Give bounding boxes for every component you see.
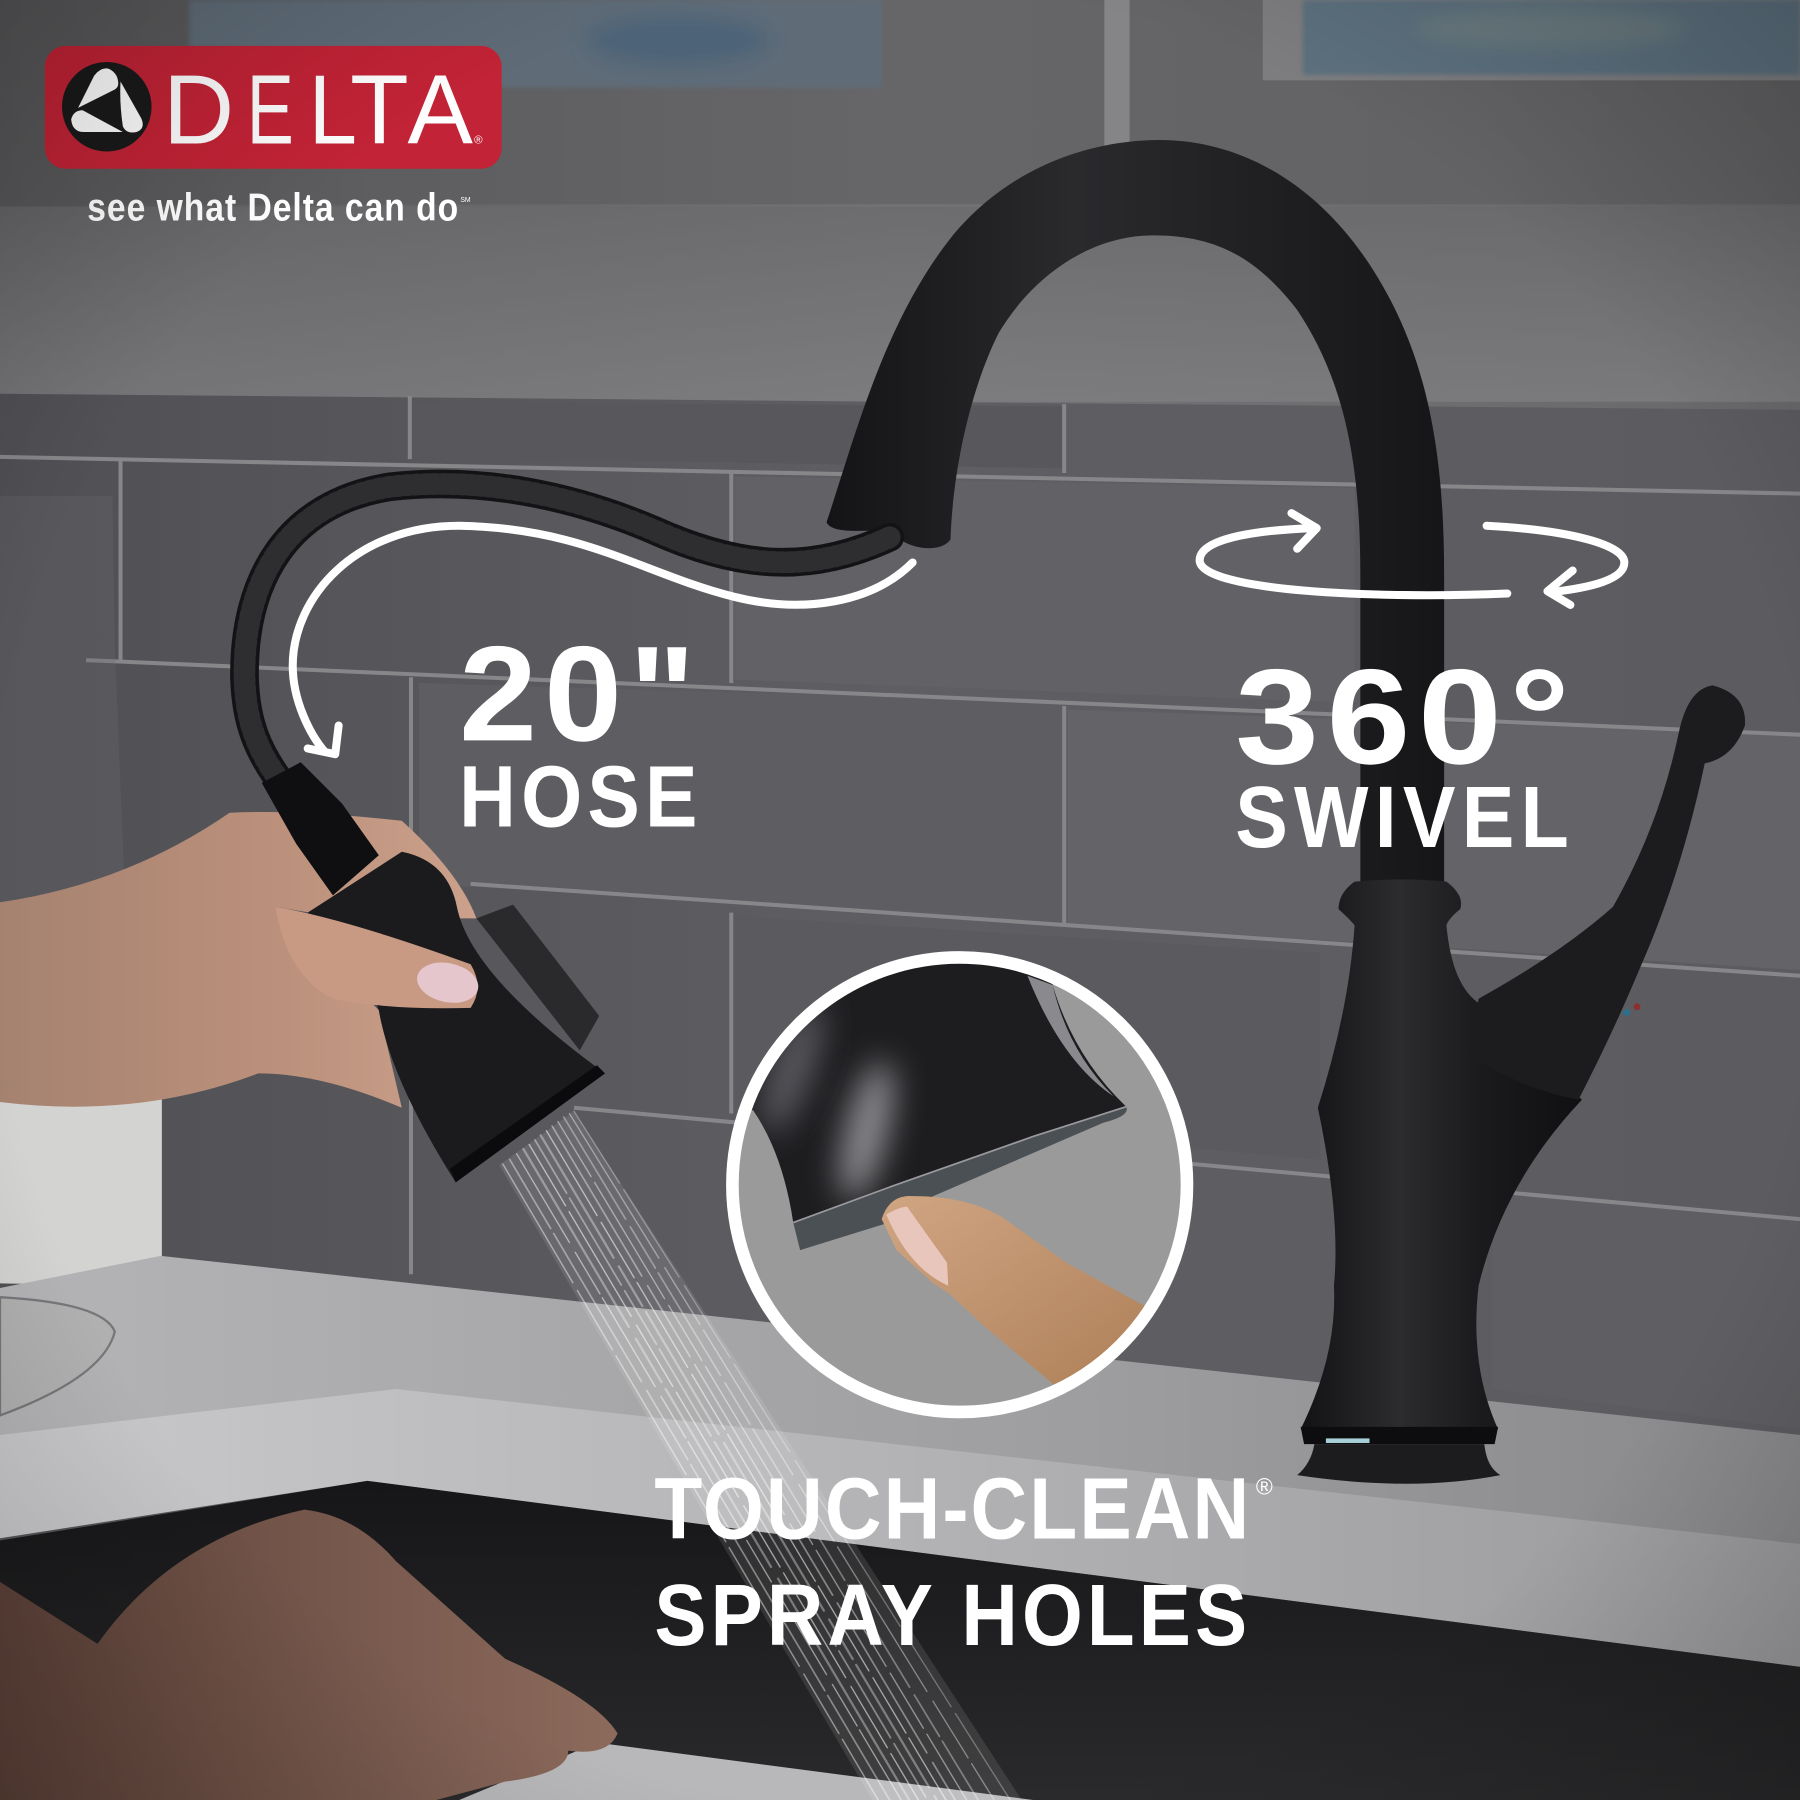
logo: Delta: ® [474, 134, 483, 146]
logo: Delta [45, 46, 502, 229]
tiled backsplash [0, 394, 1800, 1446]
braided hose [244, 484, 890, 783]
icon: Delta triangle mark [62, 62, 152, 152]
heading: 20 inch hose [459, 617, 703, 846]
faucet handle [1469, 685, 1745, 1100]
callout: touch-clean spray holes [712, 941, 1187, 1412]
glass vase [0, 496, 124, 907]
thumb [276, 907, 482, 1008]
heading: 360 degree swivel: 360° [1235, 640, 1577, 792]
arrow: swivel rotation [1200, 513, 1624, 605]
lower hand [0, 1510, 618, 1800]
water spray [499, 1111, 1022, 1800]
heading: 20 inch hose: 20" [459, 617, 703, 769]
heading: touch-clean spray holes: ® [1256, 1474, 1273, 1500]
faucet spout [827, 140, 1444, 890]
heading: 20 inch hose: HOSE [459, 749, 703, 846]
countertop [0, 1256, 1800, 1667]
logo: Delta: SM [460, 197, 471, 204]
upper hand holding sprayer [0, 812, 476, 1108]
wordmark: DELTA: T [350, 54, 409, 164]
heading: touch-clean spray holes [654, 1460, 1273, 1664]
heading: touch-clean spray holes: TOUCH-CLEAN [654, 1460, 1251, 1557]
faucet body [1297, 879, 1582, 1484]
wordmark: DELTA: L [309, 54, 357, 164]
sprayer connector [262, 762, 379, 895]
heading: 360 degree swivel: SWIVEL [1235, 769, 1575, 866]
wordmark: DELTA: E [247, 54, 294, 164]
wordmark: DELTA: D [163, 54, 234, 164]
sprayer close-up [752, 964, 1127, 1250]
wall art: blurred blue prints [189, 0, 1800, 87]
pull-down sprayer head [308, 852, 605, 1182]
wordmark: DELTA [163, 54, 473, 164]
background: upper wall [0, 0, 1800, 413]
heading: touch-clean spray holes: SPRAY HOLES [654, 1567, 1251, 1664]
arrow: hose reach [293, 526, 913, 754]
heading: 360 degree swivel [1235, 640, 1577, 866]
fingertip [882, 1196, 1154, 1391]
white canister [0, 1091, 162, 1284]
sink basin [0, 1481, 1800, 1800]
logo: Delta: see what Delta can do [87, 186, 459, 229]
plate [0, 1297, 115, 1415]
wordmark: DELTA: A [408, 54, 473, 164]
